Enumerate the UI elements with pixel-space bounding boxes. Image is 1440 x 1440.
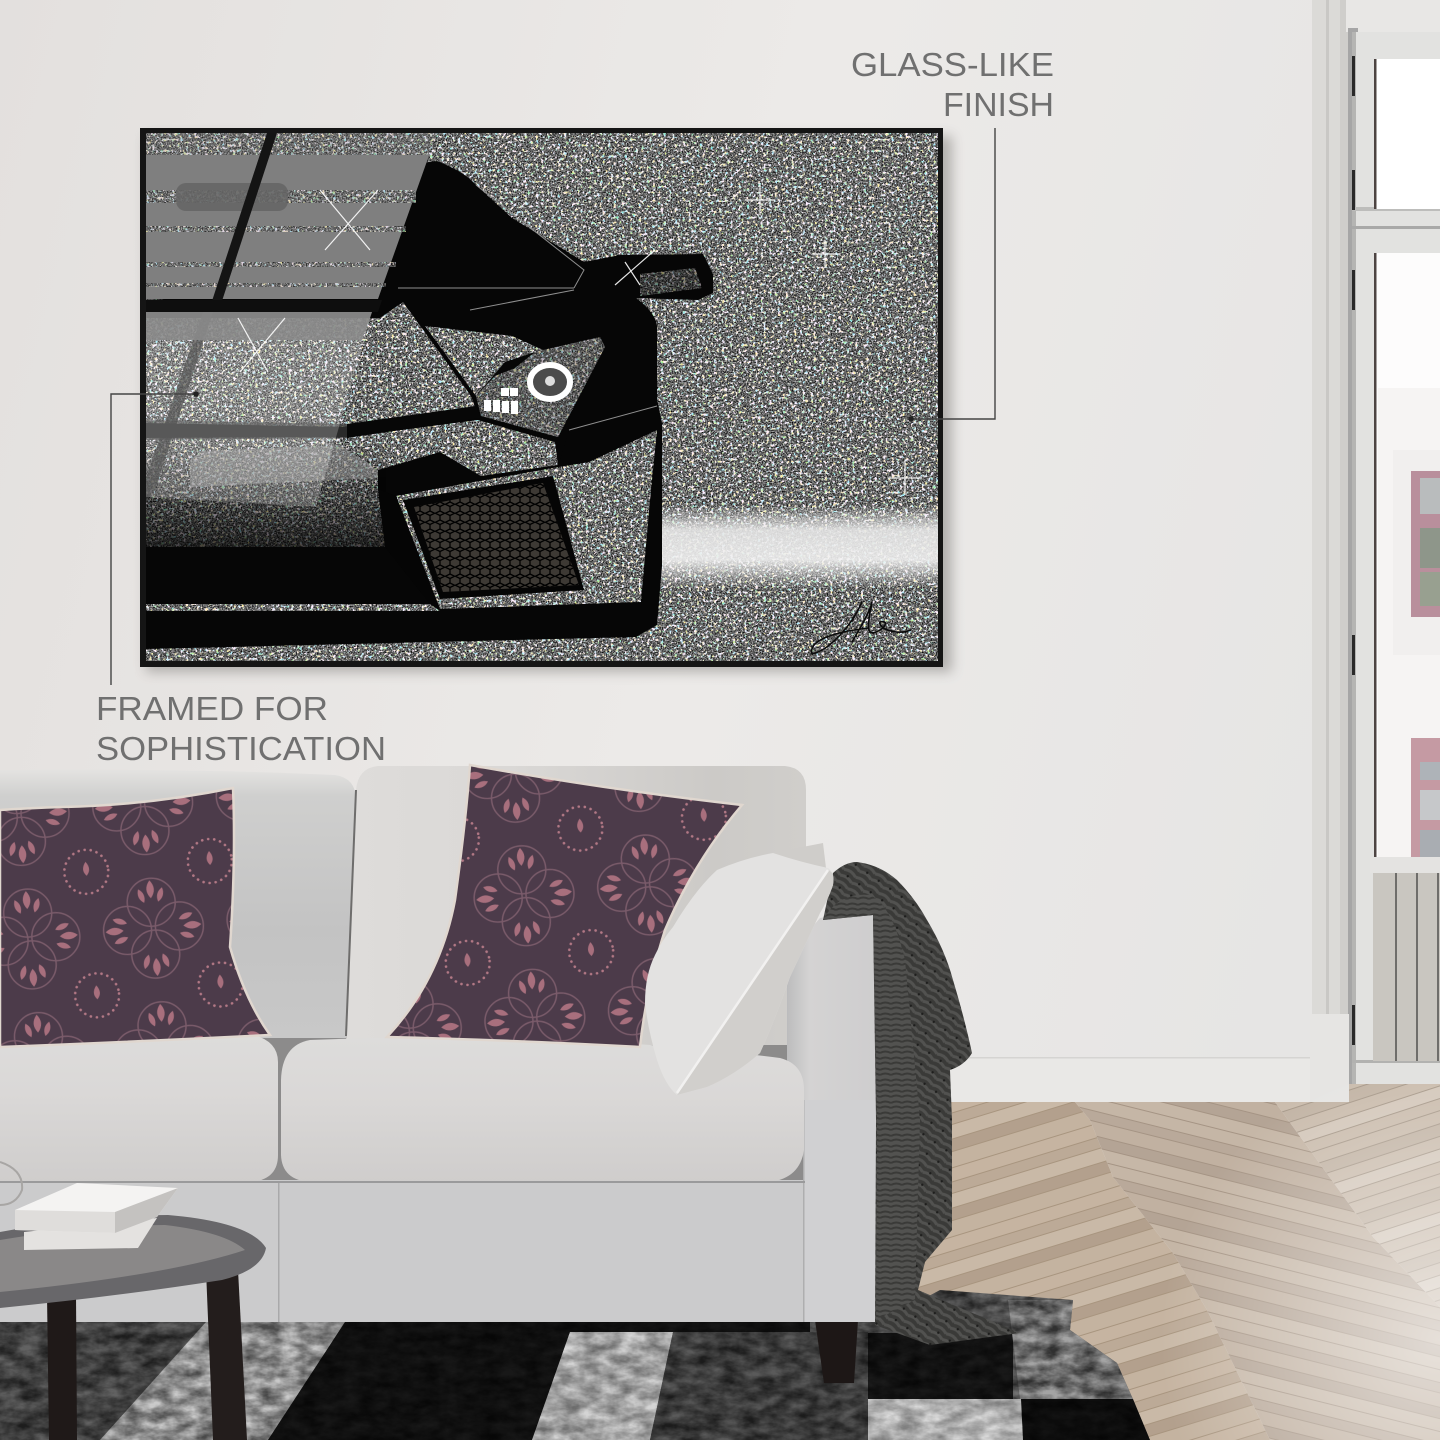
wall reflection upper pane — [146, 133, 437, 299]
pillow piping — [677, 870, 828, 1093]
label: glass-like finish — [851, 46, 1054, 123]
black hood stripe — [347, 406, 481, 438]
frame shadow — [146, 136, 952, 672]
window and door frame — [1312, 0, 1440, 1100]
pillow back flap — [777, 843, 826, 868]
label: framed for sophistication: FRAMED FOR — [96, 690, 328, 727]
glowing ground band — [650, 505, 938, 589]
headlight ring — [530, 365, 570, 399]
sofa arm — [787, 914, 877, 1322]
floor right boards — [1275, 1084, 1440, 1307]
reflection glitter strips — [146, 133, 446, 293]
reflection flat band — [146, 312, 372, 340]
lower window pane with outside view — [1374, 59, 1440, 857]
headlight LEDs — [484, 388, 518, 414]
upper book — [15, 1183, 178, 1233]
throw front fold — [823, 895, 920, 1320]
pillow shaded side — [677, 870, 833, 1095]
door lower wood panel — [1370, 857, 1440, 1061]
table leg back — [206, 1270, 247, 1440]
car silhouette — [146, 161, 713, 649]
callout line: glass-like finish — [908, 128, 995, 422]
pillow body — [645, 853, 833, 1095]
left seat cushion — [0, 1034, 278, 1182]
rug light block — [868, 1399, 1023, 1440]
lower shadow on hood — [146, 440, 386, 547]
rug light stripe — [100, 1322, 345, 1440]
right back cushion — [346, 766, 806, 1045]
sparkle stars — [238, 185, 922, 495]
glitter background — [146, 133, 938, 661]
purple pillow left — [0, 788, 270, 1047]
side black wedge — [558, 406, 657, 467]
base — [0, 1180, 804, 1322]
sofa leg — [815, 1320, 858, 1383]
rug — [0, 1285, 1155, 1440]
label: glass-like finish: GLASS-LIKE — [851, 46, 1054, 83]
windshield highlights — [398, 185, 657, 430]
sofa body under cushions — [0, 1020, 805, 1190]
mirror shade — [640, 268, 702, 296]
rug dark centre stripe — [650, 1332, 868, 1440]
cushion seam — [346, 790, 356, 1036]
marble top — [0, 1215, 266, 1308]
throw main drape — [823, 862, 1020, 1345]
rug black block — [868, 1333, 1013, 1399]
knitted throw blanket — [823, 862, 1020, 1345]
intake mesh — [414, 483, 579, 592]
seat shadow line — [0, 1181, 805, 1183]
white pillow — [645, 843, 833, 1095]
air intake — [378, 476, 584, 609]
rug light centre stripe — [532, 1332, 673, 1440]
upper window pane — [1374, 59, 1440, 209]
rug black corner block — [1021, 1399, 1150, 1440]
label: framed for sophistication — [96, 690, 386, 767]
right seat cushion — [281, 1037, 804, 1182]
window mullion horizontal — [146, 300, 382, 312]
intake shadow — [378, 489, 440, 609]
black frame — [140, 128, 943, 667]
lower book — [24, 1218, 157, 1250]
floor left boards — [860, 1102, 1270, 1440]
marble highlight — [0, 1225, 245, 1292]
rug grey block — [1008, 1300, 1133, 1399]
coffee table — [0, 1162, 266, 1440]
casing plinth — [1310, 1014, 1349, 1102]
car glitter panels — [146, 268, 702, 611]
label: framed for sophistication: SOPHISTICATION — [96, 730, 386, 767]
framed artwork — [140, 128, 952, 672]
left back cushion — [0, 770, 356, 1038]
herringbone wood floor — [860, 1084, 1440, 1440]
wall reflection lower pane — [146, 312, 372, 507]
floor middle boards — [1075, 1102, 1440, 1440]
label: glass-like finish: FINISH — [943, 86, 1054, 123]
window mullion vertical — [212, 133, 277, 301]
mullion lower — [146, 312, 213, 500]
rear-view mirror — [176, 183, 288, 211]
sofa — [0, 765, 1020, 1383]
purple pillow right — [387, 765, 742, 1047]
rug black stripe — [268, 1322, 810, 1440]
callout line: framed — [111, 391, 199, 685]
headlight — [476, 337, 605, 437]
artist signature — [812, 602, 911, 654]
rug left mottled stripe — [0, 1322, 206, 1440]
table leg front — [47, 1295, 77, 1440]
door casing trim — [1312, 0, 1348, 1100]
glass on table — [0, 1162, 22, 1205]
baseboard — [940, 1057, 1312, 1102]
faint stripe through reflection — [146, 420, 347, 440]
bumper block — [190, 445, 378, 487]
rug mottled texture — [0, 1285, 1155, 1440]
floor sunlight — [1160, 1084, 1440, 1440]
